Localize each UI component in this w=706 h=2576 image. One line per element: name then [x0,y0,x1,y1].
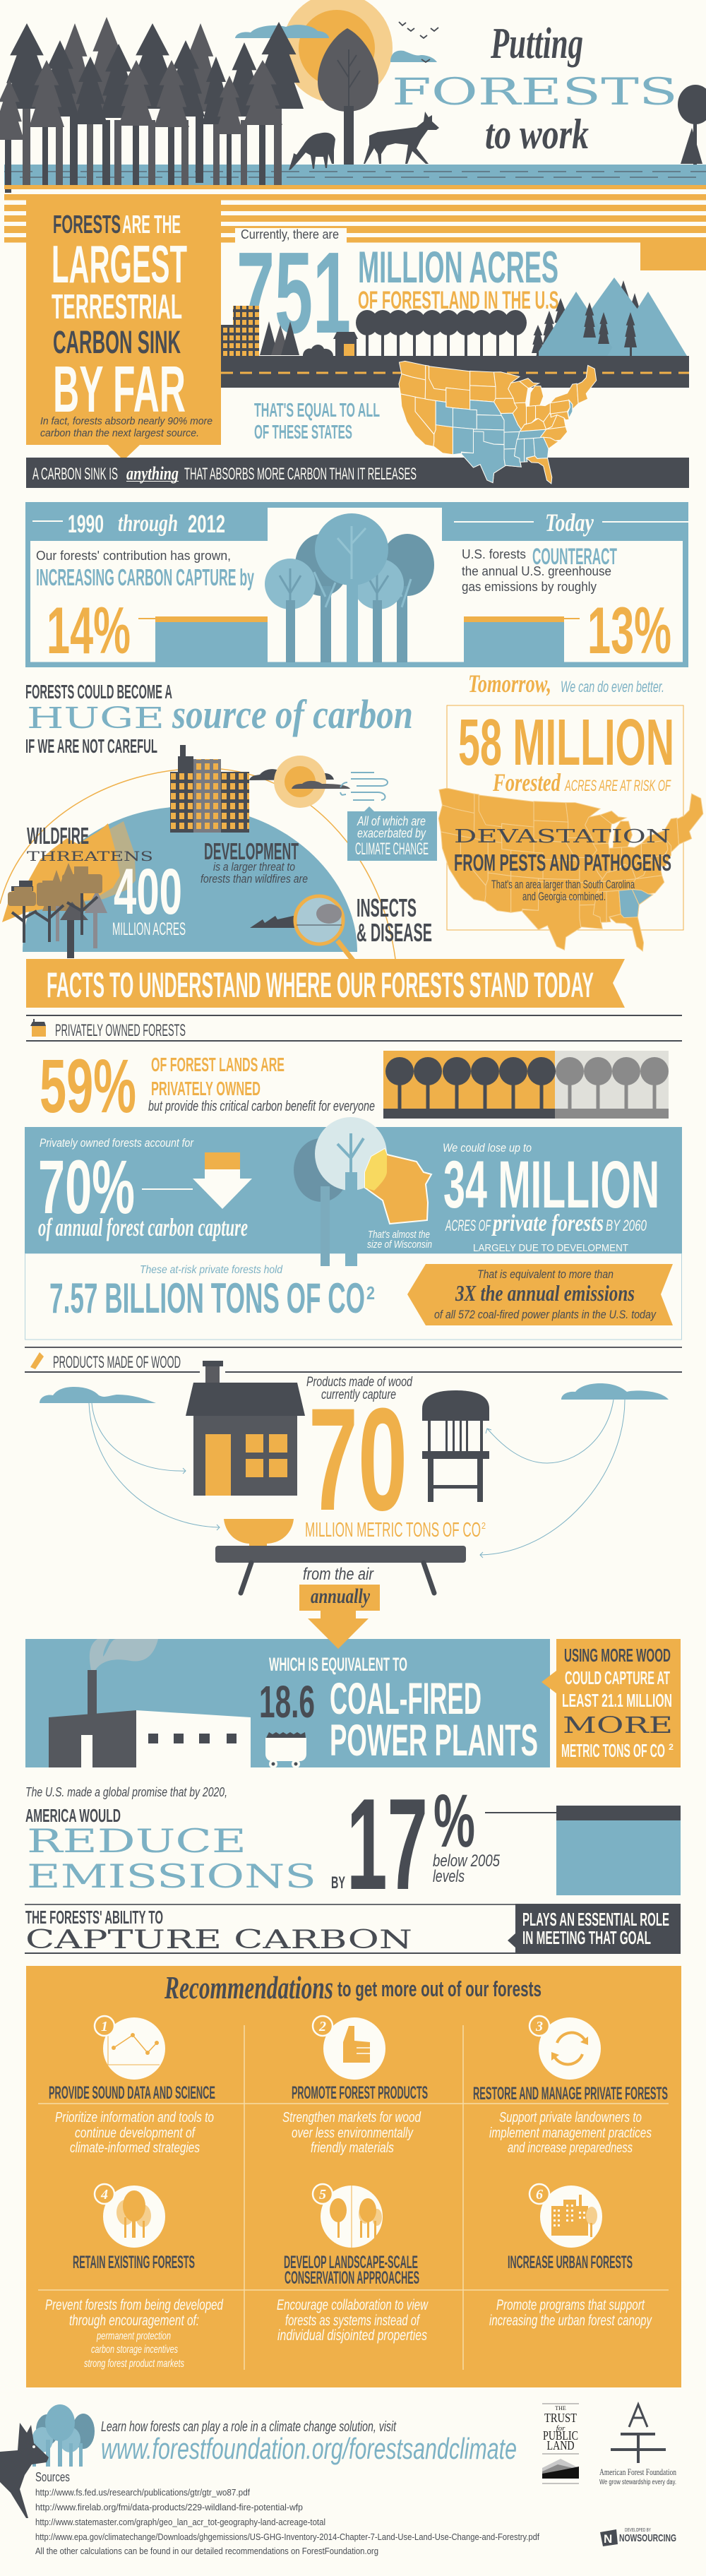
callout: using more wood [542,1639,681,1767]
text: forested acres at risk of [492,768,671,797]
recommendation 1: sound data: 1 [101,2019,108,2034]
logo: the trust for public land: LAND [546,2438,575,2452]
stat: 751 million acres: MILLION ACRES [358,243,558,292]
panel: 1990 through 2012 and today: INCREASING CARBON CAPTURE by [36,564,254,590]
illustration: clouds with arrows [40,1383,669,1558]
title [392,20,678,157]
stat: 34 million acres: ACRES OF [445,1217,491,1234]
stat: 34 million acres [443,1141,659,1254]
sources: http://www.firelab.org/fmi/data-products/229-wildland-fire-potential-wfp [35,2502,303,2512]
callout: using more wood: 2 [669,1742,674,1752]
section: reduce emissions by 17 percent: levels [433,1867,465,1886]
section: reduce emissions by 17 percent: BY [331,1873,345,1892]
stat: 59 percent privately owned: but provide this critical carbon benefit for everyone [148,1099,375,1114]
logo: the trust for public land: THE [555,2405,566,2411]
section heading: privately owned forests: PRIVATELY OWNED FORESTS [55,1021,186,1040]
text: wisconsin note [367,1229,432,1251]
stat: 70 million metric tons: MILLION METRIC TONS OF CO [305,1519,481,1542]
recommendation 4: retain forests: strong forest product markets [84,2358,184,2370]
illustration: magnifier and insect [250,896,353,960]
stat: 59 percent privately owned: OF FOREST LANDS ARE [151,1054,285,1075]
text: insects and disease: & DISEASE [357,918,432,947]
recommendation 4: retain forests: 4 [100,2187,108,2202]
section: reduce emissions by 17 percent: EMISSIONS [27,1857,316,1895]
panel: largest carbon sink: ARE THE [122,210,181,239]
logo: the trust for public land: TRUST [544,2411,577,2425]
recommendation 2: forest products: friendly materials [311,2140,394,2156]
illustration: wildfire and burned trees [2,821,136,958]
recommendation 1: sound data: climate-informed strategies [70,2140,200,2156]
text: wisconsin note: That's almost the [368,1229,430,1241]
text: development: forests than wildfires are [201,872,308,886]
recommendation 1: sound data [49,2016,215,2156]
logo: american forest foundation: American Forest Foundation [599,2467,676,2477]
bar: carbon sink definition: THAT ABSORBS MORE CARBON THAN IT RELEASES [184,465,417,484]
heading: huge source of carbon: source of carbon [172,691,413,737]
panel: largest carbon sink: TERRESTRIAL [52,288,182,326]
panel: 1990 through 2012 and today: 1990 [68,511,104,538]
recommendation 3: restore and manage: 3 [535,2019,543,2034]
logo: american forest foundation [599,2404,676,2486]
text: devastation from pests and pathogens: That's an area larger than South Carolina [491,878,635,891]
illustration: bowl on table [215,1519,466,1593]
heading: huge source of carbon [25,681,413,757]
panel: 70 percent blue [25,1127,682,1253]
recommendation 2: forest products: 2 [318,2019,326,2034]
stat: 59 percent privately owned: PRIVATELY OWNED [151,1078,261,1099]
panel: coal-fired power plants: 18.6 [259,1676,315,1727]
text: wildfire threatens 400 million acres: 400 [114,856,182,928]
arrow: annually [299,1585,380,1649]
callout: climate change: All of which are [357,814,426,828]
panel: coal-fired power plants: COAL-FIRED [330,1674,481,1724]
ribbon: 3X annual emissions: That is equivalent to more than [477,1268,614,1281]
stat: 34 million acres: LARGELY DUE TO DEVELOPMENT [473,1242,628,1254]
section: reduce emissions by 17 percent: below 2005 [433,1852,501,1871]
stat: 7.57 billion tons: 2 [366,1282,375,1304]
heading: recommendations: Recommendations [164,1969,333,2005]
logo: the trust for public land [542,2404,579,2483]
illustration: trees and wisconsin [294,1117,431,1266]
illustration: blue trees [265,513,434,662]
panel: coal-fired power plants: POWER PLANTS [330,1716,538,1765]
section: capture carbon [25,1904,681,1955]
recommendation 2: forest products: PROMOTE FOREST PRODUCTS [292,2083,428,2103]
text: insects and disease: INSECTS [357,893,417,922]
recommendation 5: landscape-scale conservation: Encourage collaboration to view [277,2297,429,2313]
callout: climate change: exacerbated by [357,826,426,840]
text: equal to all of these states [254,399,380,443]
chart line: orange arc [0,768,395,959]
panel: 1990 through 2012 and today: Our forests' contribution has grown, [36,549,231,563]
section: reduce emissions by 17 percent: The U.S. made a global promise that by 2020, [25,1785,227,1799]
logo: nowsourcing: N [604,2532,612,2546]
recommendation 6: urban forests: 6 [536,2187,543,2202]
text: tomorrow we can do even better: Tomorrow, [468,669,551,698]
recommendation 5: landscape-scale conservation: 5 [319,2187,326,2202]
title: FORESTS [392,71,678,114]
panel: largest carbon sink: carbon than the next largest source. [40,427,199,439]
sources: http://www.fs.fed.us/research/publications/gtr/gtr_wo87.pdf [35,2487,250,2498]
sources: http://www.epa.gov/climatechange/Downloads/ghgemissions/US-GHG-Inventory-2014-Chapter-7-Land-Use-Land-Use-Change-and-Forestry.pdf [35,2532,539,2542]
recommendation 4: retain forests [45,2184,224,2370]
stat: 34 million acres: private forests [491,1210,604,1236]
panel: largest carbon sink: BY FAR [53,352,186,426]
decorative orange stripes [4,185,706,270]
text: forested acres at risk of: Forested [492,768,561,797]
label background: currently there are [235,228,347,243]
illustration: river band [4,165,706,186]
stat: 70 million metric tons: 70 [309,1378,407,1541]
panel: 1990 through 2012 and today: U.S. forests [462,547,526,561]
icon: birds [399,22,438,62]
section heading: privately owned forests [26,1015,682,1042]
bar: carbon sink definition: A CARBON SINK IS [32,465,118,484]
heading: recommendations: to get more out of our forests [337,1976,542,2001]
recommendation 3: restore and manage [473,2016,668,2156]
logo: nowsourcing: DEVELOPED BY [625,2528,651,2533]
section: reduce emissions by 17 percent: 17 [347,1771,428,1916]
stat: 7.57 billion tons: These at-risk private forests hold [140,1264,283,1276]
illustration: climate sun, clouds and wind [249,756,388,808]
recommendation 4: retain forests: carbon storage incentives [91,2344,178,2356]
stat: 751 million acres: OF FORESTLAND IN THE U.S. [358,287,563,314]
illustration: small trees at right [678,85,706,165]
stat: 70 percent capture [38,1136,252,1241]
text: development: is a larger threat to [213,860,295,873]
recommendation 5: landscape-scale conservation: DEVELOP LANDSCAPE-SCALE [284,2253,418,2272]
text: wildfire threatens 400 million acres: MILLION ACRES [112,919,186,939]
title: to work [485,111,589,157]
stat: 751 million acres: 751 [237,228,351,357]
panel: 1990 through 2012 and today: Today [545,508,594,537]
recommendation 5: landscape-scale conservation: individual disjointed properties [277,2327,427,2344]
panel: largest carbon sink: FORESTS [53,210,121,239]
recommendation 3: restore and manage: implement management practices [489,2125,652,2141]
section heading: products made of wood [25,1347,682,1373]
heading: huge source of carbon: IF WE ARE NOT CAREFUL [25,735,157,757]
illustration: footer trees [32,2404,95,2467]
stat: 70 percent capture: of annual forest carbon capture [38,1213,248,1241]
illustration: wooden house [186,1361,305,1496]
text: wildfire threatens 400 million acres [27,823,186,939]
stat: 70 million metric tons: 2 [481,1520,486,1531]
text: development: DEVELOPMENT [204,838,299,864]
illustration: wooden chair [422,1390,489,1502]
illustration: footer deer [0,2423,49,2518]
stat: 59 percent privately owned: 59% [40,1043,136,1128]
ribbon: 3X annual emissions: of all 572 coal-fired power plants in the U.S. today [434,1308,657,1321]
text: devastation from pests and pathogens: DEVASTATION [454,826,671,847]
recommendation 4: retain forests: through encouragement of: [69,2313,199,2329]
ribbon: 3X annual emissions: 3X the annual emissions [455,1280,635,1306]
recommendation 3: restore and manage: Support private landowners to [499,2110,642,2125]
stat: 34 million acres: BY 2060 [606,1217,647,1234]
section: reduce emissions by 17 percent: % [433,1778,475,1863]
text: wildfire threatens 400 million acres: WILDFIRE [27,823,89,849]
illustration: threat dome [23,806,357,952]
recommendation 5: landscape-scale conservation [277,2184,429,2344]
panel: largest carbon sink: LARGEST [52,234,187,294]
call to action [101,2419,517,2465]
recommendation 6: urban forests [489,2184,652,2329]
text: insects and disease [357,893,432,947]
bar: carbon sink definition [26,458,689,488]
chart: 17 percent block [485,1806,681,1895]
text: wildfire threatens 400 million acres: THREATENS [27,849,153,864]
recommendation 2: forest products [282,2016,428,2156]
text: equal to all of these states: THAT'S EQUAL TO ALL [254,399,380,421]
recommendation 3: restore and manage: and increase preparedness [508,2140,633,2156]
heading: recommendations [164,1969,542,2005]
heading: huge source of carbon: HUGE [27,701,164,735]
section: capture carbon: CAPTURE CARBON [25,1926,412,1955]
panel: private forests outline [25,1253,682,1340]
panel: 1990 through 2012 and today: 2012 [188,511,225,538]
stat: 7.57 billion tons: 7.57 BILLION TONS OF CO [49,1275,365,1322]
logo: the trust for public land: for [556,2424,566,2433]
recommendation 1: sound data: PROVIDE SOUND DATA AND SCIENCE [49,2083,215,2103]
illustration: pine forest [0,17,304,193]
recommendation 5: landscape-scale conservation: CONSERVATION APPROACHES [285,2268,419,2288]
arrow: annually: annually [311,1585,371,1608]
text: from the air: from the air [303,1565,374,1584]
section: reduce emissions by 17 percent: AMERICA WOULD [25,1805,121,1826]
header illustration: sun and clouds [235,0,437,103]
text: devastation from pests and pathogens [454,826,671,903]
illustration: development buildings [170,745,249,833]
text: development [201,838,308,886]
stat: 751 million acres [237,228,563,357]
illustration: standing deer [364,112,439,164]
call to action: Learn how forests can play a role in a climate change solution, visit [101,2419,397,2435]
panel: coal-fired power plants: WHICH IS EQUIVALENT TO [269,1654,407,1675]
ribbon: 3X annual emissions [407,1264,673,1325]
sources: All the other calculations can be found in our detailed recommendations on ForestFoundation.org [35,2546,378,2556]
panel: largest carbon sink [26,194,221,460]
panel: largest carbon sink: CARBON SINK [53,324,181,360]
recommendation 1: sound data: Prioritize information and tools to [55,2110,214,2125]
bar: carbon sink definition: anything [126,463,179,484]
panel: 1990 through 2012 and today: gas emissions by roughly [462,580,597,594]
stat: 59 percent privately owned [40,1043,375,1128]
logo: nowsourcing [600,2528,676,2546]
stat: 70 million metric tons: Products made of wood [306,1375,413,1390]
panel: 58 million acres at risk [447,705,683,930]
callout: climate change: CLIMATE CHANGE [355,840,429,859]
stat: 34 million acres: We could lose up to [443,1141,532,1155]
title: Putting [490,20,583,68]
stat: 70 percent capture: Privately owned forests account for [40,1136,194,1150]
recommendation 2: forest products: Strengthen markets for wood [282,2110,421,2125]
section: reduce emissions by 17 percent [25,1771,501,1916]
stat: 70 million metric tons: currently capture [321,1388,396,1402]
panel: 1990 through 2012 and today: 14% [47,593,131,667]
illustration: large tree [318,28,378,165]
recommendation 6: urban forests: Promote programs that support [496,2297,645,2313]
panel: 1990 through 2012 and today: through [118,511,178,537]
illustration: road [221,356,689,388]
panel: coal-fired power plants [25,1639,550,1768]
panel: largest carbon sink: In fact, forests absorb nearly 90% more [40,415,213,427]
map: forest area equals these states [399,360,597,486]
logo: american forest foundation: We grow stewardship every day. [599,2479,676,2486]
section heading: products made of wood: PRODUCTS MADE OF WOOD [53,1353,181,1372]
text: equal to all of these states: OF THESE STATES [254,421,352,443]
call to action: www.forestfoundation.org/forestsandclimate [101,2432,517,2465]
panel: 1990 through 2012 and today [25,502,688,667]
section: capture carbon: THE FORESTS' ABILITY TO [25,1907,163,1928]
map: pests and pathogens [438,787,703,954]
stat: 7.57 billion tons [49,1264,375,1322]
logo: the trust for public land: PUBLIC [543,2428,578,2443]
panel: 1990 through 2012 and today: the annual U.S. greenhouse [462,564,611,578]
heading: huge source of carbon: FORESTS COULD BECOME A [25,681,172,703]
stat: 70 percent capture: 70% [38,1144,135,1229]
sources: Sources [35,2470,70,2484]
text: devastation from pests and pathogens: and Georgia combined. [522,890,606,903]
text: currently there are: Currently, there are [241,227,339,242]
text: wisconsin note: size of Wisconsin [367,1239,432,1251]
recommendation 2: forest products: over less environmentally [292,2125,414,2141]
recommendation 4: retain forests: permanent protection [96,2330,171,2342]
recommendation 5: landscape-scale conservation: forests as systems instead of [285,2313,421,2329]
panel: recommendations background [26,1966,681,2387]
callout: using more wood: MORE [563,1712,673,1739]
illustration: grazing deer [289,133,335,170]
callout: climate change [347,806,437,861]
recommendation 1: sound data: continue development of [75,2125,196,2141]
logo: nowsourcing: NOWSOURCING [619,2532,676,2544]
chart: tree pictogram 6 of 10 [383,1051,669,1119]
sources: http://www.statemaster.com/graph/geo_lan_acr_tot-geography-land-acreage-total [35,2517,325,2527]
section: reduce emissions by 17 percent: REDUCE [27,1822,246,1860]
sources [35,2470,539,2556]
illustration: landscape with city, trees and mountains [221,278,687,356]
recommendation 4: retain forests: RETAIN EXISTING FORESTS [73,2253,195,2272]
recommendation 4: retain forests: Prevent forests from being developed [45,2297,224,2313]
panel: 1990 through 2012 and today: COUNTERACT [532,544,617,569]
text: tomorrow we can do even better [468,669,664,698]
